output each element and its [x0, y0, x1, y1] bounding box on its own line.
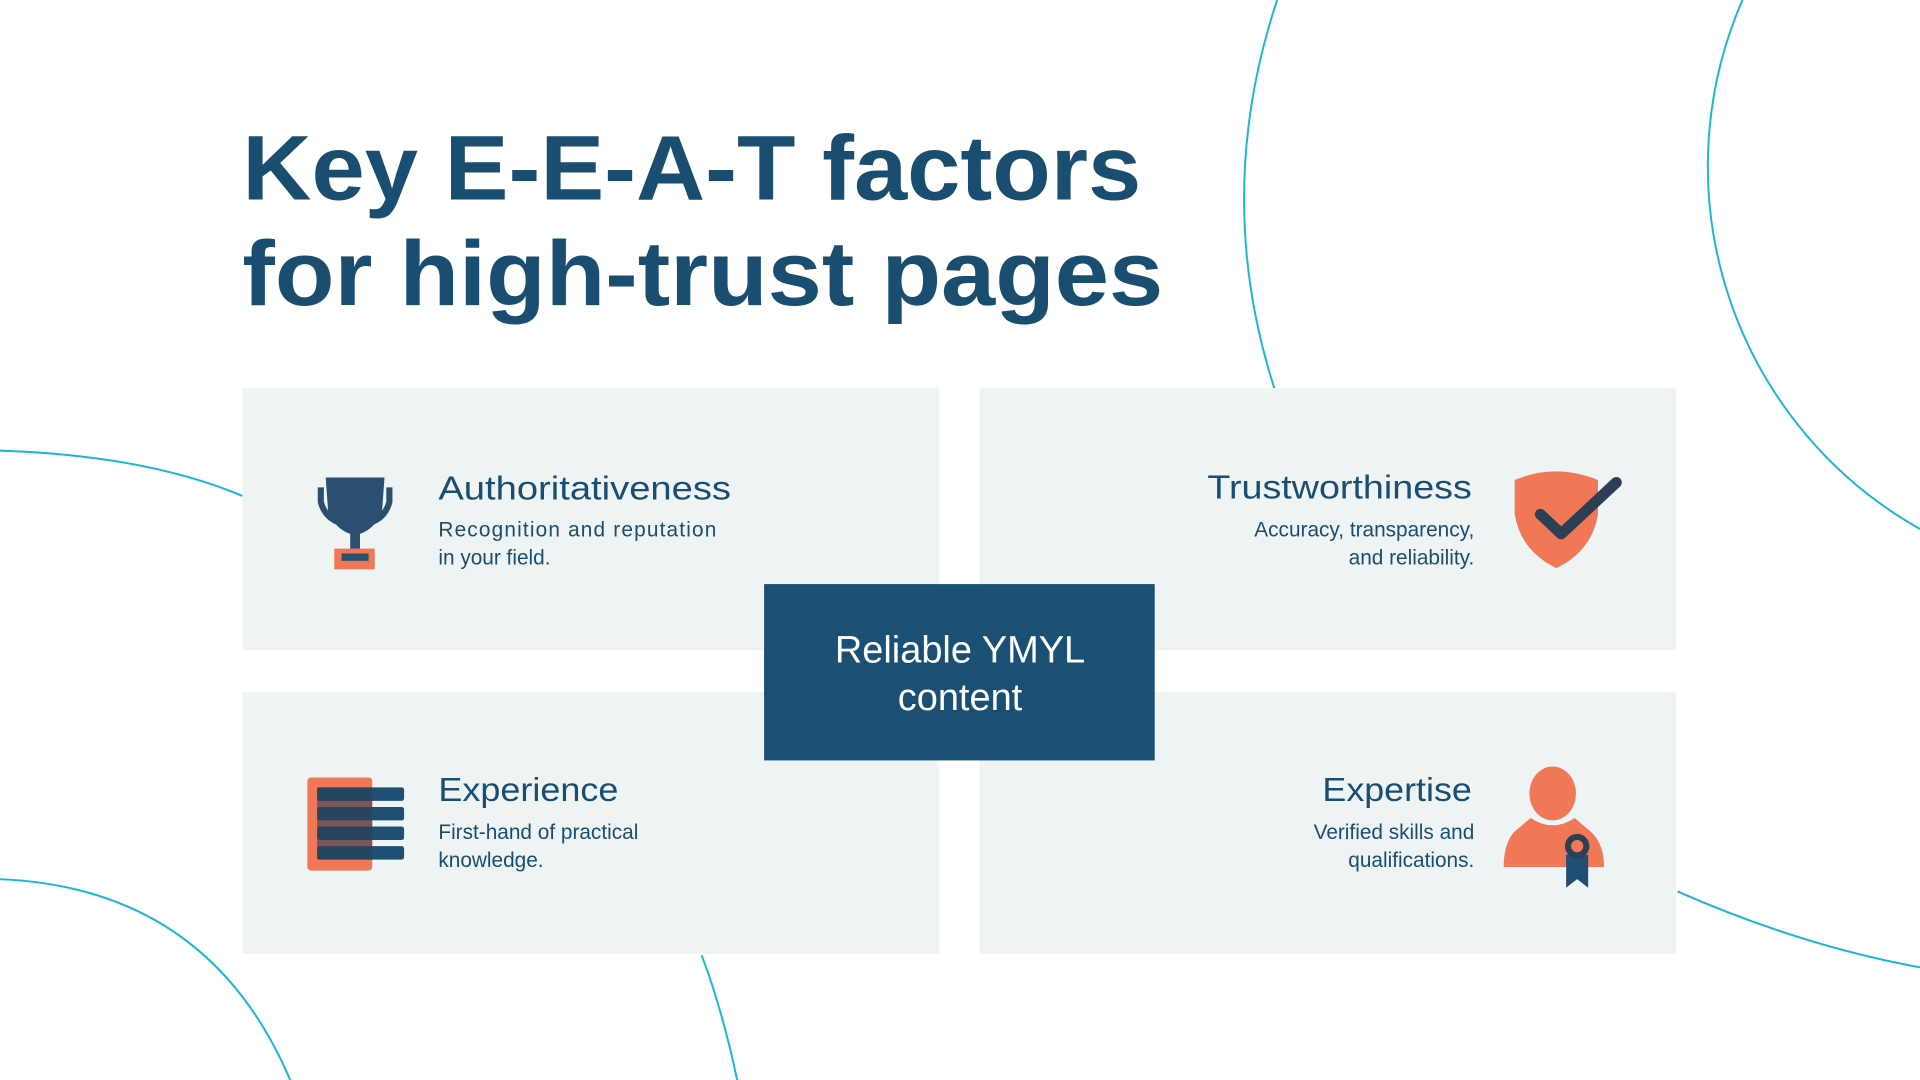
center box: Reliable YMYL: [835, 629, 1085, 671]
panel: trustworthiness: and reliability.: [1349, 546, 1474, 569]
panel: authoritativeness: Authoritativeness: [438, 471, 731, 508]
panel: trustworthiness: Accuracy, transparency,: [1254, 518, 1474, 541]
icon: person with badge: [1504, 767, 1604, 888]
center box: content: [898, 677, 1023, 719]
panel: expertise: qualifications.: [1348, 849, 1474, 872]
panel: authoritativeness: in your field.: [438, 546, 551, 569]
panel: authoritativeness: Recognition and reputation: [438, 518, 716, 541]
panel: trustworthiness: [980, 388, 1676, 650]
panel: trustworthiness: Trustworthiness: [1207, 469, 1472, 506]
icon: trophy: [321, 478, 389, 569]
panel: experience: Experience: [438, 772, 618, 809]
title: Key E-E-A-T factors: [242, 118, 1141, 220]
panel: experience: [242, 692, 939, 954]
icon: book stack: [307, 778, 404, 871]
panel: authoritativeness: [242, 388, 939, 650]
panel: expertise: [980, 692, 1676, 954]
panel: expertise: Expertise: [1322, 772, 1472, 809]
title: [242, 118, 1163, 325]
title: for high-trust pages: [242, 223, 1163, 325]
panel: expertise: Verified skills and: [1314, 821, 1474, 844]
panel: experience: knowledge.: [438, 849, 544, 872]
center box: [764, 584, 1155, 760]
icon: shield: [1515, 471, 1616, 568]
panel: experience: First-hand of practical: [438, 821, 638, 844]
